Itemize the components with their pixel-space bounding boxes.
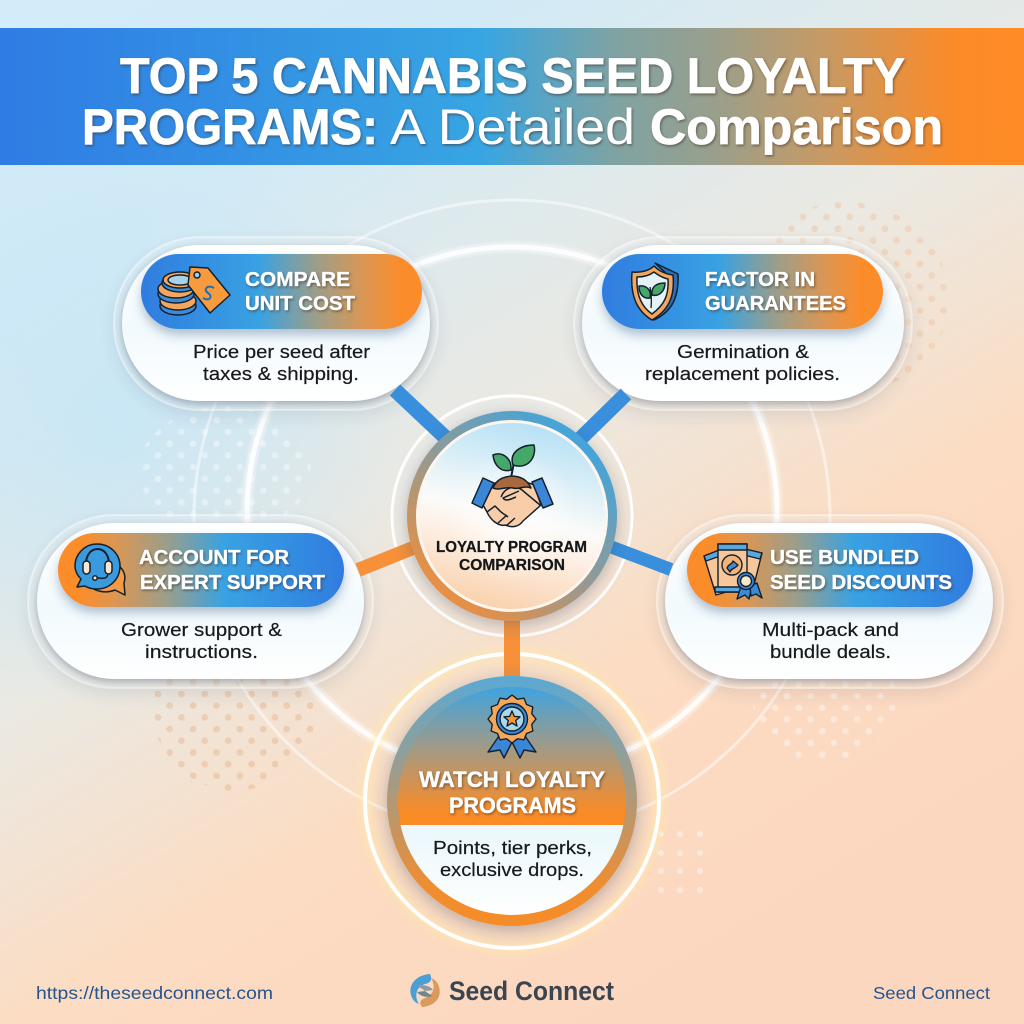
panel: account for expert support	[28, 515, 373, 688]
heading: PROGRAMS	[449, 793, 576, 818]
heading	[245, 268, 355, 315]
icon: handshake with sprout	[472, 445, 553, 527]
heading: USE BUNDLED	[770, 546, 919, 569]
description	[121, 619, 283, 662]
title: TOP 5 CANNABIS SEED LOYALTY	[120, 48, 905, 104]
footer logo	[410, 974, 614, 1007]
panel: watch loyalty programs	[387, 676, 637, 926]
hub halo ring	[392, 396, 632, 636]
icon: shield with sprout	[632, 263, 678, 320]
heading: UNIT COST	[245, 292, 355, 315]
description: Multi-pack and	[762, 619, 899, 640]
panel: compare unit cost	[114, 237, 438, 410]
heading: FACTOR IN	[705, 268, 815, 291]
center label	[436, 539, 587, 574]
heading: WATCH LOYALTY	[419, 767, 605, 792]
icon: seed packs with ribbon	[704, 544, 762, 599]
concentric rings	[194, 200, 830, 836]
title	[82, 48, 943, 155]
icon: headset speech bubbles	[75, 544, 125, 595]
panel: use bundled seed discounts	[657, 515, 1003, 688]
icon: coins and price tag	[158, 267, 230, 315]
description	[433, 837, 592, 880]
description: Germination &	[677, 341, 810, 362]
center label: COMPARISON	[459, 557, 565, 574]
description: Points, tier perks,	[433, 837, 592, 858]
description: instructions.	[145, 641, 258, 662]
heading: EXPERT SUPPORT	[140, 571, 325, 594]
heading: GUARANTEES	[705, 292, 846, 315]
description: replacement policies.	[645, 363, 840, 384]
heading	[770, 546, 952, 594]
icon: seed connect mark	[410, 974, 440, 1007]
glow ring	[365, 654, 659, 948]
description: Grower support &	[121, 619, 283, 640]
description	[762, 619, 899, 662]
heading	[419, 767, 605, 818]
connectors	[358, 390, 671, 680]
description: bundle deals.	[770, 641, 891, 662]
title banner	[0, 28, 1024, 165]
title: A Detailed	[390, 99, 635, 155]
icon: award medal	[488, 695, 536, 758]
description: taxes & shipping.	[203, 363, 359, 384]
center label: LOYALTY PROGRAM	[436, 539, 587, 556]
panel: factor in guarantees	[574, 237, 912, 410]
title: Comparison	[650, 99, 943, 155]
heading	[705, 268, 846, 315]
title: PROGRAMS:	[82, 99, 378, 155]
description	[645, 341, 840, 384]
panel: central hub	[407, 411, 617, 621]
description: Price per seed after	[193, 341, 370, 362]
heading: ACCOUNT FOR	[139, 546, 289, 569]
heading	[139, 546, 325, 594]
footer url: https://theseedconnect.com	[36, 983, 273, 1003]
heading: SEED DISCOUNTS	[770, 571, 952, 594]
footer brand: Seed Connect	[873, 983, 990, 1003]
wordmark: Seed Connect	[449, 976, 614, 1006]
heading: COMPARE	[245, 268, 350, 291]
description	[193, 341, 370, 384]
description: exclusive drops.	[440, 859, 584, 880]
